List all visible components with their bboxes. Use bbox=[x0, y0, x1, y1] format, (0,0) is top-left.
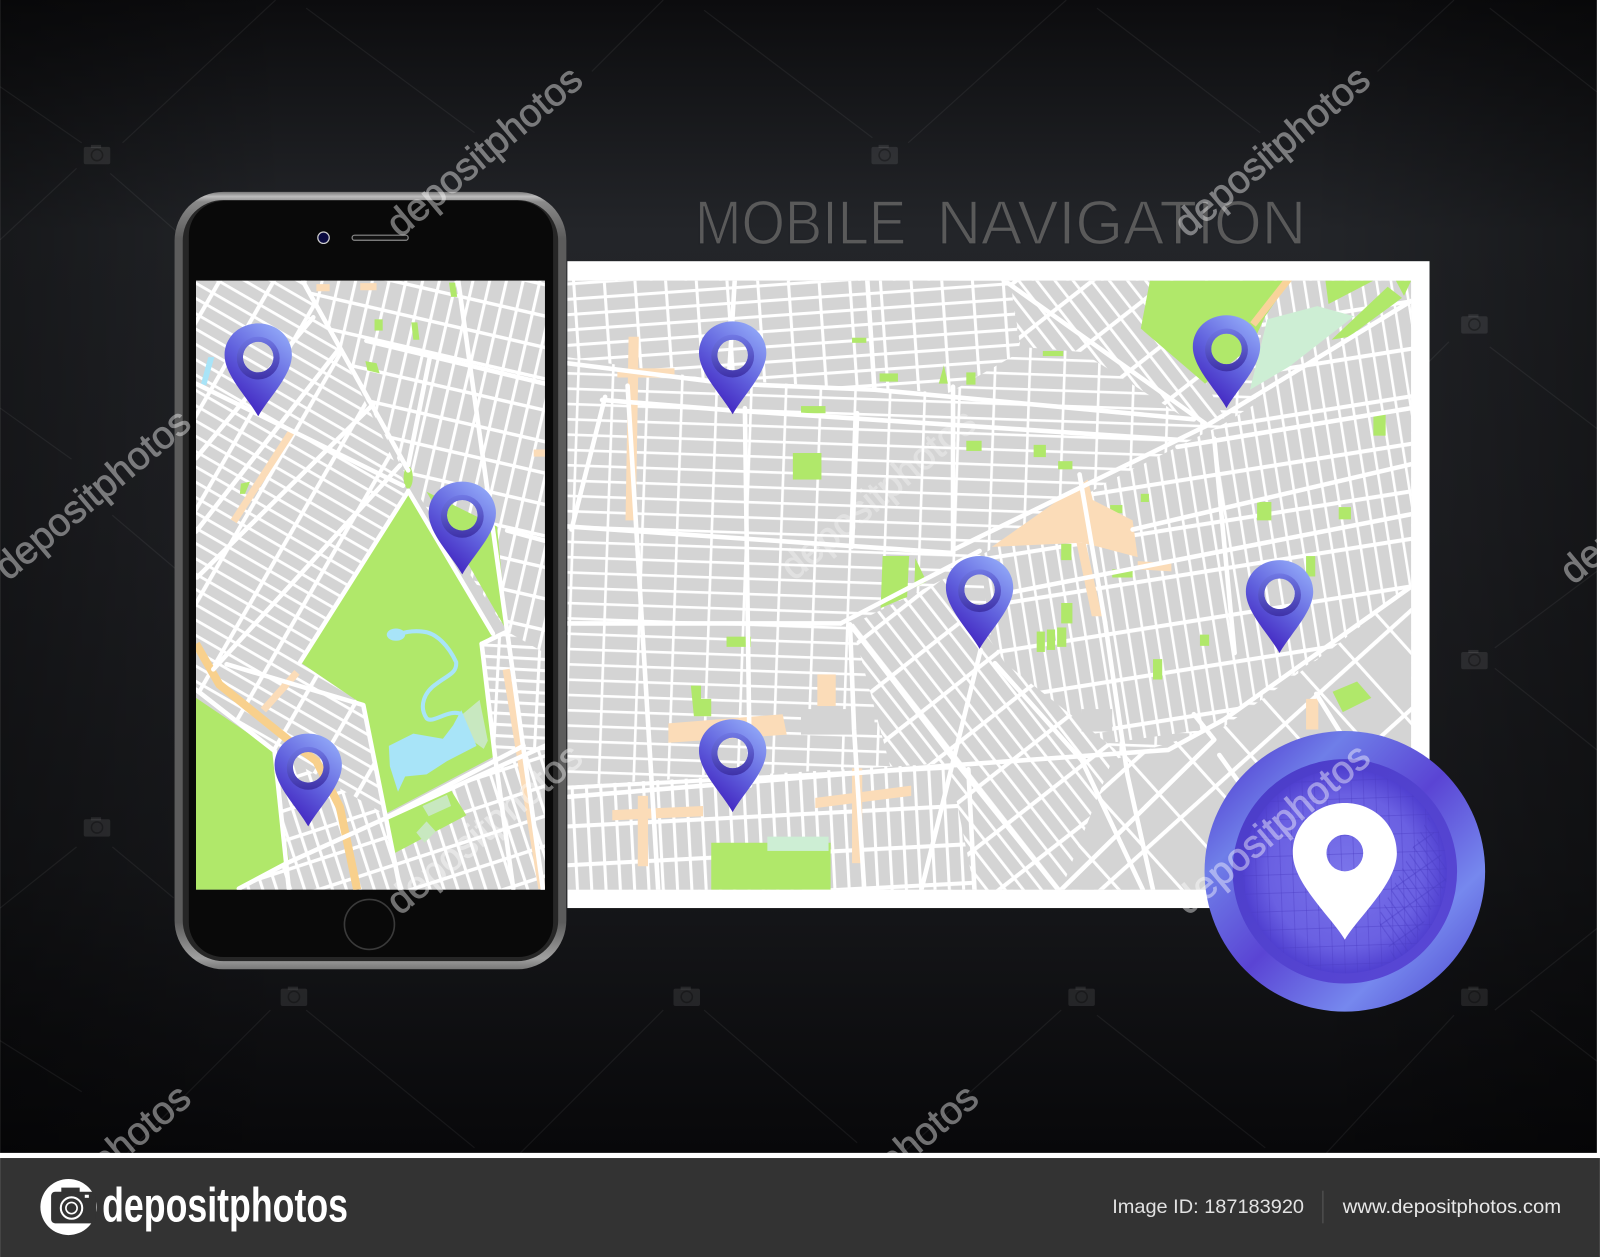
pins on paper map bbox=[699, 315, 1313, 812]
medallion: location badge bbox=[1205, 731, 1485, 1012]
watermark cameras bbox=[84, 145, 1488, 1006]
phone: orange roads bbox=[234, 287, 545, 889]
map: pale green areas bbox=[767, 306, 1354, 851]
footer bar bbox=[0, 1153, 1600, 1257]
solid blocks bbox=[801, 709, 1112, 735]
phone: highway bbox=[196, 644, 357, 890]
map: parks bbox=[691, 281, 1411, 890]
watermark text: depositphotos bbox=[1166, 58, 1378, 246]
title: MOBILE bbox=[695, 189, 906, 258]
panel: paper map bbox=[567, 261, 1430, 908]
watermark text: depositphotos bbox=[772, 400, 985, 588]
phone: parks bbox=[196, 283, 507, 890]
footer: camera logo bbox=[40, 1179, 97, 1235]
map: main roads bbox=[567, 280, 1411, 890]
footer: image id: Image ID: 187183920 bbox=[1112, 1196, 1304, 1218]
medallion: white pin bbox=[1293, 803, 1397, 940]
watermark text: depositphotos bbox=[378, 735, 591, 923]
watermark text: depositphotos bbox=[1166, 735, 1378, 923]
phone: pale green bbox=[416, 700, 488, 843]
phone camera bbox=[318, 232, 329, 243]
watermark text: depositphotos bbox=[378, 58, 591, 246]
phone: lake bbox=[201, 357, 477, 792]
phone screen map bbox=[196, 281, 545, 890]
phone: main roads bbox=[196, 281, 545, 889]
phone bbox=[175, 192, 566, 969]
footer: website: www.depositphotos.com bbox=[1342, 1196, 1561, 1218]
phone body bbox=[175, 192, 566, 969]
map: street grid bbox=[567, 278, 1411, 890]
phone home button bbox=[344, 899, 394, 949]
pins on phone map bbox=[225, 323, 496, 826]
title bbox=[695, 189, 1306, 258]
phone speaker bbox=[352, 235, 408, 240]
title: NAVIGATION bbox=[937, 189, 1306, 258]
map: orange road bbox=[1253, 278, 1290, 324]
footer: logo wordmark: depositphotos bbox=[102, 1179, 348, 1232]
map: orange districts bbox=[612, 337, 1318, 866]
medallion: map texture bbox=[1244, 779, 1446, 966]
